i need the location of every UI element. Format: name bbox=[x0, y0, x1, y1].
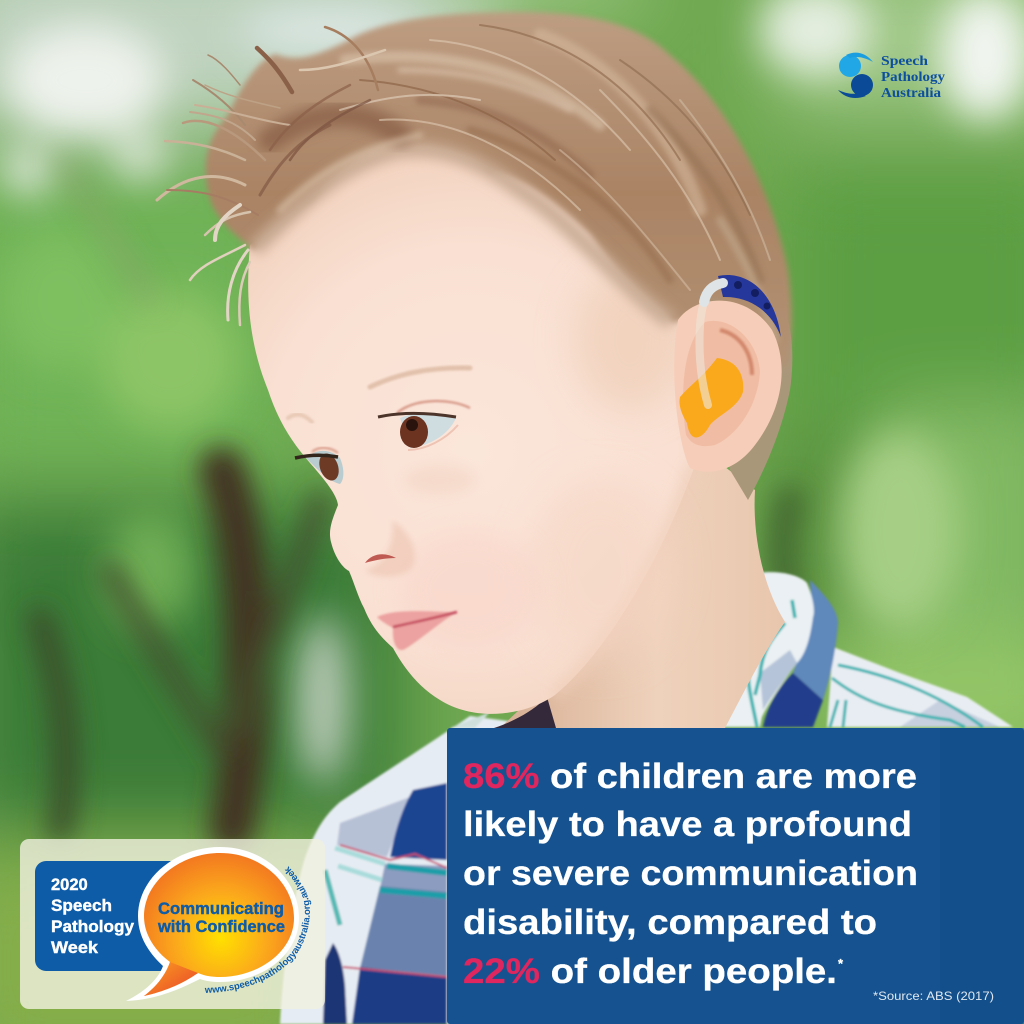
hair bbox=[157, 12, 792, 372]
badge: 2020 Speech Pathology Week bbox=[20, 839, 325, 1009]
face bbox=[248, 130, 710, 714]
tube bbox=[699, 283, 723, 405]
blue label: Speech bbox=[51, 897, 112, 915]
speech bubble: Communicating bbox=[158, 900, 284, 918]
statistic text bbox=[463, 757, 918, 991]
shirt body bbox=[280, 716, 560, 1024]
back of collar bbox=[793, 580, 838, 700]
badge backing bbox=[20, 839, 325, 1009]
hearing aid body bbox=[718, 275, 781, 337]
fine strands bbox=[340, 25, 770, 290]
mouth bbox=[377, 611, 457, 650]
statistic text: 22% of older people. bbox=[463, 952, 837, 991]
jaw blend bbox=[555, 465, 695, 695]
nose bbox=[365, 520, 415, 577]
speech bubble bbox=[126, 847, 299, 1001]
hair mass bbox=[206, 12, 792, 372]
speech bubble: with Confidence bbox=[157, 918, 285, 936]
cheek shade bbox=[530, 480, 670, 660]
collar front bbox=[723, 572, 814, 727]
shirt bbox=[280, 572, 1013, 1024]
logo: Speech Pathology Australia: Speech bbox=[881, 54, 928, 69]
eye: near bbox=[378, 401, 470, 450]
statistic text: likely to have a profound bbox=[463, 805, 912, 844]
statistic text: * bbox=[838, 956, 844, 971]
logo: Speech Pathology Australia: Australia bbox=[881, 86, 941, 101]
blue label bbox=[35, 861, 185, 971]
source: *Source: ABS (2017) bbox=[873, 989, 994, 1003]
back hair behind ear bbox=[690, 240, 792, 500]
blue label: Pathology bbox=[51, 918, 135, 936]
eye: far bbox=[295, 448, 343, 484]
neck bbox=[500, 440, 785, 728]
blue label: 2020 bbox=[51, 876, 88, 894]
blue label: Week bbox=[51, 939, 99, 957]
hair shading bbox=[270, 35, 775, 340]
eyebrows bbox=[370, 368, 470, 387]
statistic text: disability, compared to bbox=[463, 903, 877, 942]
logo mark bbox=[838, 53, 873, 98]
logo: Speech Pathology Australia bbox=[838, 53, 945, 101]
right shoulder bbox=[827, 647, 1013, 727]
curved url: www.speechpathologyaustralia.org.au/week bbox=[204, 866, 312, 993]
ear mould bbox=[679, 358, 743, 438]
statistic text: 86% of children are more bbox=[463, 757, 917, 796]
ear bbox=[674, 275, 782, 472]
logo: Speech Pathology Australia: Pathology bbox=[881, 70, 945, 85]
statistic text: or severe communication bbox=[463, 854, 918, 893]
flyaway strands bbox=[157, 27, 385, 325]
info panel bbox=[447, 728, 1024, 1024]
